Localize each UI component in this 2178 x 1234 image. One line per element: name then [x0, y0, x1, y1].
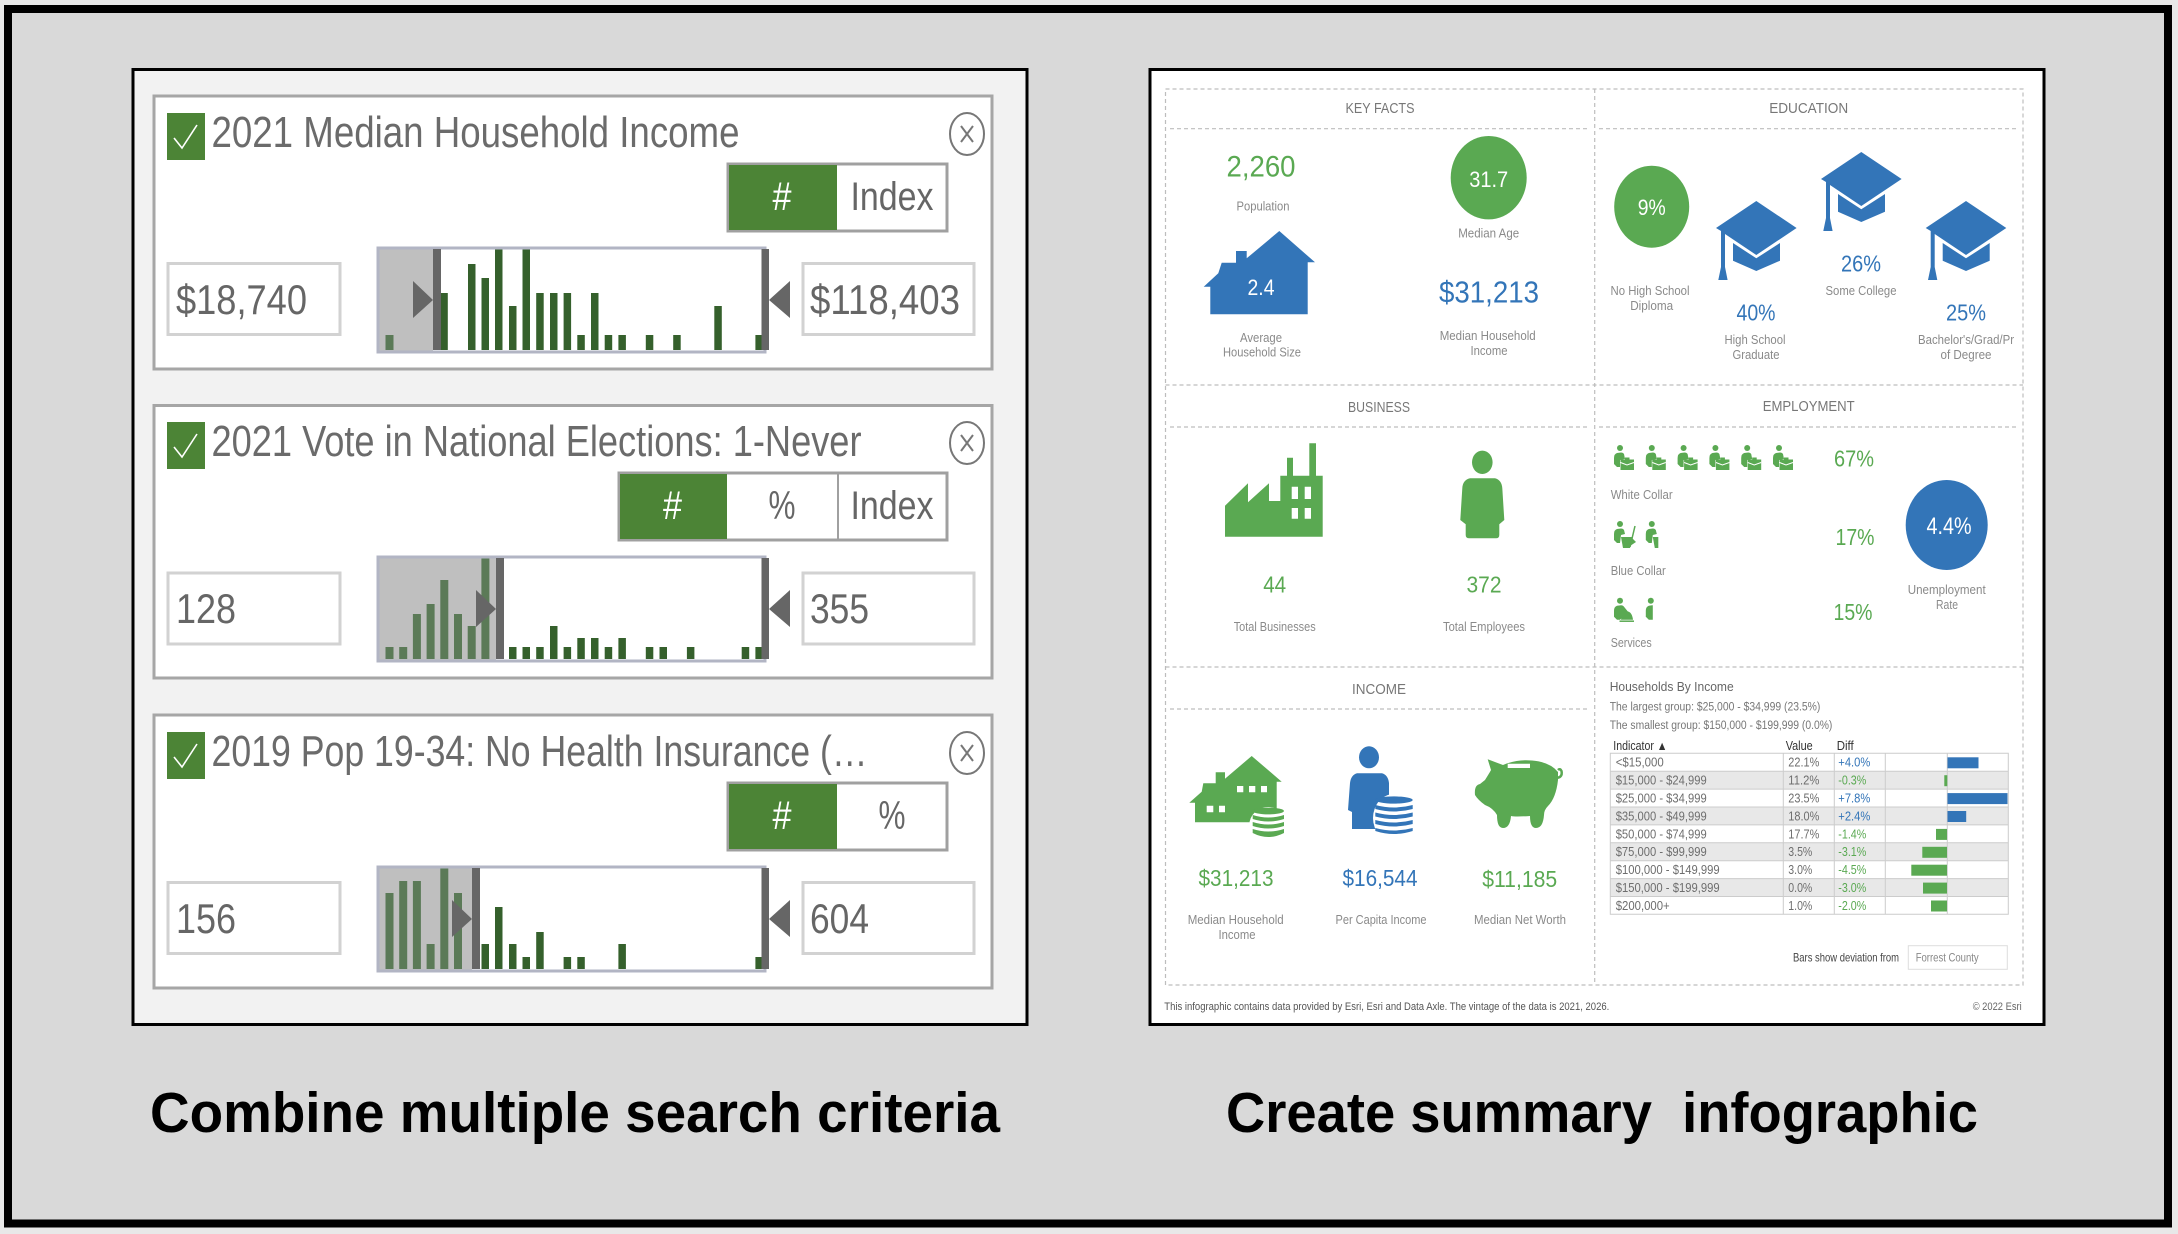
minimum value [168, 573, 340, 644]
table values [1788, 756, 1819, 913]
table row labels: $150,000 - $199,999 [1616, 881, 1720, 895]
section: households by income table [1610, 679, 2008, 969]
table row labels: $50,000 - $74,999 [1616, 827, 1707, 841]
median household income stat: Median Household [1188, 913, 1284, 927]
services row: 15% [1834, 599, 1872, 625]
services row: Services [1611, 636, 1652, 650]
deviation legend: Bars show deviation from [1793, 951, 1899, 965]
histogram slider [378, 867, 790, 971]
table differences: -3.0% [1838, 881, 1866, 895]
household size house icon [1204, 231, 1315, 360]
total employees stat: Total Employees [1443, 620, 1525, 634]
unit toggle [728, 164, 947, 231]
checkbox [167, 732, 205, 779]
maximum value: 604 [810, 895, 869, 942]
heading: EMPLOYMENT [1763, 398, 1855, 415]
unemployment rate stat [1906, 480, 1988, 612]
median age stat: Median Age [1458, 227, 1519, 241]
median household income stat: $31,213 [1198, 865, 1274, 891]
bachelor's degree stat [1918, 201, 2014, 362]
card: vote in national elections [154, 406, 992, 678]
services row [1611, 598, 1872, 650]
card: no health insurance [154, 715, 992, 988]
caption: left: Combine multiple search criteria [150, 1081, 1001, 1145]
smallest group note: The smallest group: $150,000 - $199,999 (0.0%) [1610, 720, 1833, 732]
high school graduate stat [1716, 201, 1797, 362]
median net worth stat: $11,185 [1482, 866, 1557, 892]
deviation legend: Forrest County [1916, 951, 1979, 965]
table grid [1610, 753, 2008, 914]
deviation legend [1793, 946, 2007, 969]
some college stat: 26% [1841, 251, 1881, 277]
filter title: 2019 Pop 19-34: No Health Insurance (… [212, 727, 868, 776]
maximum value: 355 [810, 585, 869, 632]
per capita income stat: Per Capita Income [1336, 913, 1427, 927]
median age stat: 31.7 [1469, 167, 1508, 192]
histogram slider [378, 557, 790, 661]
per capita income stat [1336, 746, 1427, 927]
minimum value: 156 [176, 895, 236, 942]
unit toggle: Index [850, 175, 934, 219]
total employees stat: 372 [1466, 571, 1502, 597]
median household income stat: Income [1218, 928, 1256, 942]
unit toggle: % [878, 794, 906, 838]
unit toggle: # [772, 794, 792, 838]
white collar row [1611, 445, 1874, 502]
table values: 0.0% [1788, 881, 1812, 895]
filter title: 2021 Vote in National Elections: 1-Never [212, 417, 862, 466]
table row labels [1616, 756, 1720, 913]
total businesses stat [1225, 443, 1323, 634]
checkbox [167, 422, 205, 469]
household size house icon: Average [1240, 331, 1282, 345]
maximum value [803, 264, 974, 334]
unemployment rate stat: Rate [1936, 598, 1958, 612]
unit toggle [728, 783, 947, 850]
table row labels: $25,000 - $34,999 [1616, 792, 1707, 806]
table values: 3.5% [1788, 845, 1812, 859]
bachelor's degree stat: of Degree [1940, 348, 1992, 362]
section: income [1188, 681, 1566, 942]
unemployment rate stat: 4.4% [1926, 513, 1972, 540]
no high school diploma stat: No High School [1610, 284, 1690, 298]
unit toggle: # [772, 175, 792, 219]
section: key facts [1204, 100, 1539, 360]
card: median household income [154, 96, 992, 369]
high school graduate stat: High School [1724, 333, 1786, 347]
table values: 17.7% [1788, 827, 1819, 841]
section: education [1610, 100, 2014, 362]
blue collar row [1611, 521, 1874, 578]
table header: Value [1786, 739, 1813, 753]
blue collar row: Blue Collar [1611, 564, 1666, 578]
minimum value [168, 264, 340, 334]
deviation bars [1911, 757, 2008, 912]
total businesses stat: 44 [1263, 571, 1286, 597]
table differences [1838, 756, 1870, 913]
table row labels: $35,000 - $49,999 [1616, 809, 1707, 823]
table values: 1.0% [1788, 899, 1812, 913]
table differences: +4.0% [1838, 756, 1870, 770]
table values: 22.1% [1788, 756, 1819, 770]
median household income stat: Median Household [1440, 329, 1536, 343]
no high school diploma stat: Diploma [1630, 299, 1673, 313]
table header [1613, 739, 1854, 753]
heading: BUSINESS [1348, 399, 1410, 416]
table header: Indicator ▲ [1613, 739, 1667, 753]
checkbox [167, 113, 205, 160]
largest group note: The largest group: $25,000 - $34,999 (23.5%) [1610, 702, 1821, 714]
close icon [950, 732, 984, 774]
table row labels: $15,000 - $24,999 [1616, 774, 1707, 788]
median household income stat: $31,213 [1439, 275, 1539, 310]
population stat: 2,260 [1226, 151, 1296, 184]
median household income stat [1188, 756, 1287, 942]
table row labels: <$15,000 [1616, 756, 1664, 770]
heading: EDUCATION [1769, 100, 1848, 117]
caption: right: Create summary infographic [1226, 1081, 1978, 1145]
table row labels: $100,000 - $149,999 [1616, 863, 1720, 877]
median household income stat: Income [1470, 344, 1508, 358]
minimum value [168, 882, 340, 954]
population stat: Population [1236, 200, 1290, 214]
maximum value [803, 882, 974, 954]
close icon [950, 113, 984, 155]
footer copyright: © 2022 Esri [1973, 1001, 2022, 1013]
bachelor's degree stat: Bachelor's/Grad/Pr [1918, 333, 2014, 347]
white collar row: White Collar [1611, 488, 1673, 502]
unit toggle: Index [850, 484, 934, 528]
blue collar row: 17% [1836, 524, 1874, 550]
table title: Households By Income [1610, 679, 1734, 694]
white collar row: 67% [1834, 446, 1874, 472]
table differences: -1.4% [1838, 827, 1866, 841]
table values: 3.0% [1788, 863, 1812, 877]
bachelor's degree stat: 25% [1946, 300, 1986, 326]
median household income stat [1439, 275, 1539, 358]
unit toggle [619, 473, 947, 540]
table differences: -0.3% [1838, 774, 1866, 788]
histogram slider [378, 248, 790, 352]
population stat [1226, 151, 1296, 214]
table row labels: $200,000+ [1616, 899, 1670, 913]
section: business [1225, 399, 1525, 634]
table values: 23.5% [1788, 792, 1819, 806]
section: employment [1611, 398, 1988, 650]
unit toggle: # [663, 484, 683, 528]
unemployment rate stat: Unemployment [1908, 583, 1986, 597]
table differences: +7.8% [1838, 792, 1870, 806]
table differences: +2.4% [1838, 809, 1870, 823]
table row labels: $75,000 - $99,999 [1616, 845, 1707, 859]
panel: summary infographic [1150, 70, 2044, 1024]
some college stat [1821, 152, 1902, 298]
some college stat: Some College [1826, 284, 1897, 298]
median net worth stat: Median Net Worth [1474, 913, 1566, 927]
table values: 11.2% [1788, 774, 1819, 788]
no high school diploma stat [1610, 166, 1690, 313]
maximum value [803, 573, 974, 644]
high school graduate stat: Graduate [1732, 348, 1780, 362]
minimum value: $18,740 [176, 276, 307, 323]
table header: Diff [1837, 739, 1854, 753]
table differences: -3.1% [1838, 845, 1866, 859]
panel: search criteria [133, 70, 1027, 1024]
filter title: 2021 Median Household Income [212, 108, 740, 157]
table values: 18.0% [1788, 809, 1819, 823]
per capita income stat: $16,544 [1342, 865, 1418, 891]
table differences: -4.5% [1838, 863, 1866, 877]
unit toggle: % [768, 484, 796, 528]
maximum value: $118,403 [810, 276, 960, 323]
household size house icon: 2.4 [1248, 275, 1274, 300]
median net worth stat [1474, 759, 1566, 927]
total businesses stat: Total Businesses [1234, 620, 1316, 634]
heading: KEY FACTS [1346, 100, 1414, 117]
minimum value: 128 [176, 585, 236, 632]
footer source note: This infographic contains data provided by Esri, Esri and Data Axle. The vintage of the data is 2021, 2026. [1164, 1001, 1609, 1013]
household size house icon: Household Size [1223, 346, 1301, 360]
close icon [950, 422, 984, 464]
heading: INCOME [1352, 681, 1406, 698]
no high school diploma stat: 9% [1638, 195, 1666, 220]
median age stat [1451, 136, 1527, 241]
total employees stat [1443, 451, 1525, 634]
table differences: -2.0% [1838, 899, 1866, 913]
high school graduate stat: 40% [1736, 300, 1776, 326]
